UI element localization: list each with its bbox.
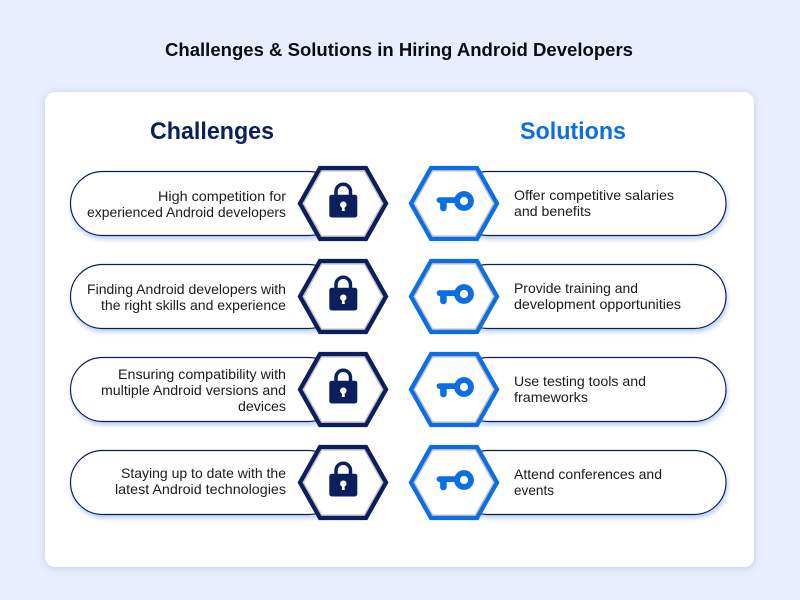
title: Challenges & Solutions in Hiring Android Developers	[165, 39, 633, 60]
solution row 2: development opportunities	[514, 296, 681, 312]
panel: main card	[45, 92, 754, 567]
solution row 4: events	[514, 482, 554, 498]
solution row 4	[411, 447, 726, 518]
solution row 3: frameworks	[514, 389, 588, 405]
solution row 1: and benefits	[514, 203, 591, 219]
challenge row 3: Ensuring compatibility with	[118, 366, 286, 382]
challenge row 2: the right skills and experience	[101, 297, 286, 313]
solution row 3: Use testing tools and	[514, 373, 646, 389]
solution row 2	[411, 261, 726, 332]
challenge row 1	[70, 168, 386, 239]
challenge row 4	[70, 447, 386, 518]
solution row 3	[411, 354, 726, 425]
challenge row 1: High competition for	[158, 188, 286, 204]
solution row 2: Provide training and	[514, 280, 638, 296]
challenge row 3	[70, 354, 386, 425]
heading: Challenges: Challenges	[150, 118, 274, 145]
challenge row 3: multiple Android versions and	[101, 382, 286, 398]
solution row 4: Attend conferences and	[514, 466, 662, 482]
heading: Solutions: Solutions	[520, 118, 626, 145]
solution row 1: Offer competitive salaries	[514, 187, 674, 203]
solution row 1	[411, 168, 726, 239]
challenge row 3: devices	[238, 398, 286, 414]
challenge row 2: Finding Android developers with	[87, 281, 286, 297]
challenge row 4: Staying up to date with the	[121, 465, 286, 481]
challenge row 1: experienced Android developers	[87, 204, 286, 220]
challenge row 4: latest Android technologies	[115, 481, 286, 497]
challenge row 2	[70, 261, 386, 332]
